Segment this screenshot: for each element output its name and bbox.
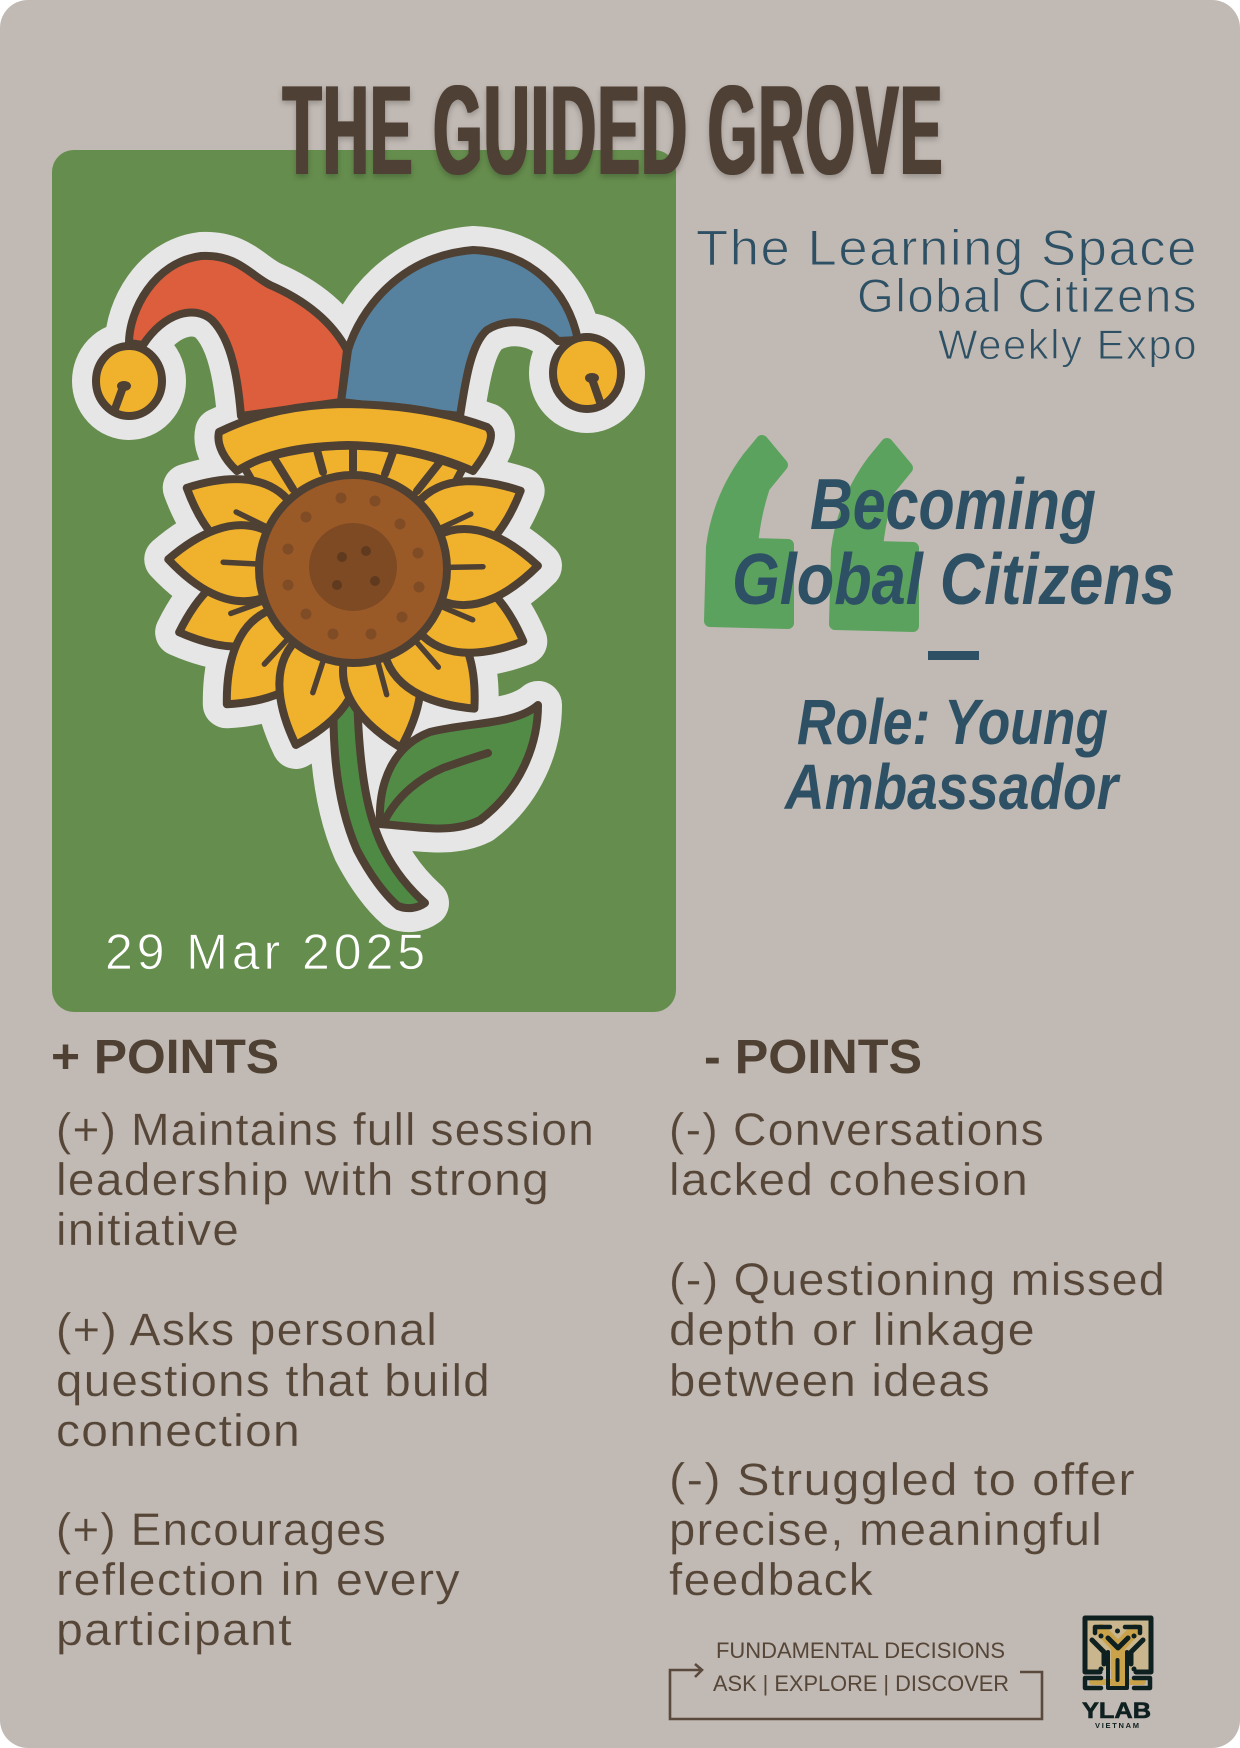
list: minus points: (-) Struggled to offer xyxy=(669,1454,1136,1505)
event subtitle xyxy=(696,220,1198,368)
sunflower rim petals under the brim xyxy=(243,446,463,530)
jester hat brim xyxy=(218,404,491,471)
logo: YLAB Vietnam xyxy=(1082,1618,1151,1730)
sunflower petals xyxy=(166,454,539,758)
icon: red hat lobe xyxy=(129,256,347,416)
date: 29 Mar 2025 xyxy=(105,924,425,980)
footer motto xyxy=(713,1638,1009,1696)
list: minus points: feedback xyxy=(669,1554,874,1605)
event subtitle: Global Citizens xyxy=(857,269,1198,322)
list: plus points: reflection in every xyxy=(56,1554,461,1605)
list: plus points: initiative xyxy=(56,1204,240,1255)
logo mark xyxy=(1085,1618,1151,1688)
heading: minus points: - POINTS xyxy=(704,1031,922,1084)
list: plus points: leadership with strong xyxy=(56,1154,550,1205)
list: plus points: (+) Maintains full session xyxy=(56,1104,595,1155)
footer motto: FUNDAMENTAL DECISIONS xyxy=(716,1638,1005,1663)
list: minus points xyxy=(669,1104,1166,1605)
list: plus points: (+) Asks personal xyxy=(56,1304,438,1355)
list: plus points: questions that build xyxy=(56,1355,491,1406)
footer motto: ASK | EXPLORE | DISCOVER xyxy=(713,1671,1009,1696)
list: minus points: (-) Conversations xyxy=(669,1104,1045,1155)
icon: green quotation marks xyxy=(710,441,913,626)
role heading: Ambassador xyxy=(783,751,1121,823)
list: plus points: connection xyxy=(56,1405,301,1456)
session heading: Becoming xyxy=(810,465,1096,545)
divider dash xyxy=(928,651,979,660)
arrow: looping frame xyxy=(670,1664,1042,1719)
list: minus points: precise, meaningful xyxy=(669,1504,1103,1555)
event subtitle: The Learning Space xyxy=(696,220,1198,276)
role heading: Role: Young xyxy=(797,686,1108,758)
icon: blue hat lobe xyxy=(341,250,578,416)
list: plus points: (+) Encourages xyxy=(56,1504,387,1555)
sunflower leaf xyxy=(380,705,538,829)
list: minus points: (-) Questioning missed xyxy=(669,1254,1166,1305)
sunflower seed disc xyxy=(259,475,447,663)
role heading xyxy=(783,686,1121,823)
panel: green illustration card xyxy=(52,150,676,1012)
icon: right bell xyxy=(553,337,621,409)
session heading: Global Citizens xyxy=(732,540,1175,620)
heading: plus points: + POINTS xyxy=(51,1031,279,1084)
sticker white border xyxy=(96,250,621,908)
list: minus points: depth or linkage xyxy=(669,1304,1036,1355)
list: minus points: between ideas xyxy=(669,1355,991,1406)
session heading xyxy=(732,465,1175,620)
list: minus points: lacked cohesion xyxy=(669,1154,1029,1205)
logo wordmark: YLAB xyxy=(1082,1698,1151,1723)
sunflower stem xyxy=(333,690,425,908)
illustration: jester sunflower sticker xyxy=(96,250,621,908)
list: plus points: participant xyxy=(56,1604,293,1655)
event subtitle: Weekly Expo xyxy=(938,321,1198,368)
icon: left bell xyxy=(96,346,162,416)
logo tagline: VIETNAM xyxy=(1095,1721,1139,1730)
list: plus points xyxy=(56,1104,595,1655)
